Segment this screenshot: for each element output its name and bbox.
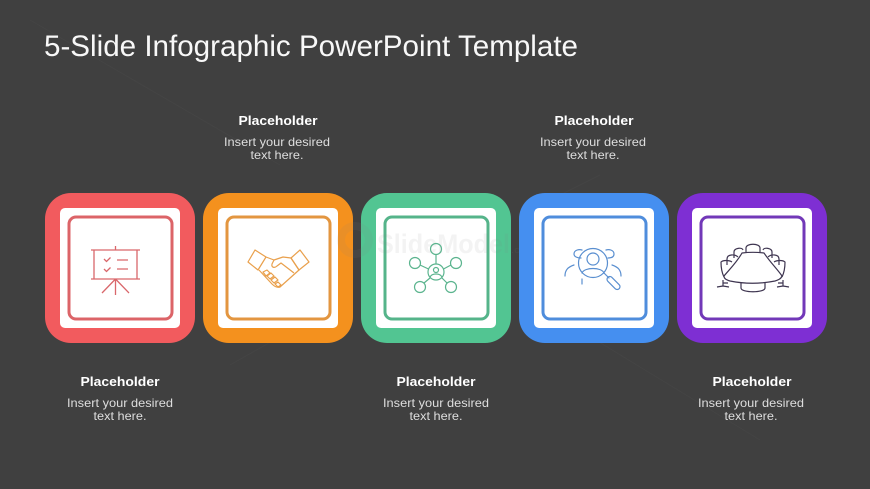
text block: top 4: Insert your desired (540, 135, 646, 149)
icon: handshake (248, 250, 309, 287)
text block: top 2: Insert your desired (224, 135, 330, 149)
watermark: SlideModel (377, 229, 510, 259)
watermark (337, 222, 535, 259)
card 3: green (361, 193, 511, 343)
icon: conference table (717, 244, 789, 292)
text block: bottom 3: Insert your desired (383, 396, 489, 410)
text block: top 2: text here. (250, 148, 304, 162)
text block: top 2 (224, 113, 330, 162)
watermark: .com (511, 245, 535, 255)
card 4: blue (519, 193, 669, 343)
text block: bottom 1: Placeholder (80, 374, 160, 389)
icon: presentation board (91, 246, 140, 295)
text block: bottom 5 (698, 374, 804, 423)
text block: bottom 3 (383, 374, 489, 423)
text block: top 4: Placeholder (554, 113, 634, 128)
text block: bottom 5: text here. (724, 409, 778, 423)
text block: bottom 1: Insert your desired (67, 396, 173, 410)
text block: top 4: text here. (566, 148, 620, 162)
card 2: orange (203, 193, 353, 343)
icon: network (410, 244, 462, 292)
text block: bottom 5: Placeholder (712, 374, 792, 389)
text block: bottom 5: Insert your desired (698, 396, 804, 410)
text block: bottom 3: text here. (410, 409, 462, 423)
card 5: purple (677, 193, 827, 343)
text block: bottom 1 (67, 374, 173, 423)
card 1: red (45, 193, 195, 343)
title: 5-Slide Infographic PowerPoint Template (44, 30, 578, 63)
text block: top 2: Placeholder (238, 113, 318, 128)
icon: people search (565, 248, 621, 291)
text block: bottom 1: text here. (94, 409, 146, 423)
text block: bottom 3: Placeholder (396, 374, 476, 389)
text block: top 4 (540, 113, 646, 162)
